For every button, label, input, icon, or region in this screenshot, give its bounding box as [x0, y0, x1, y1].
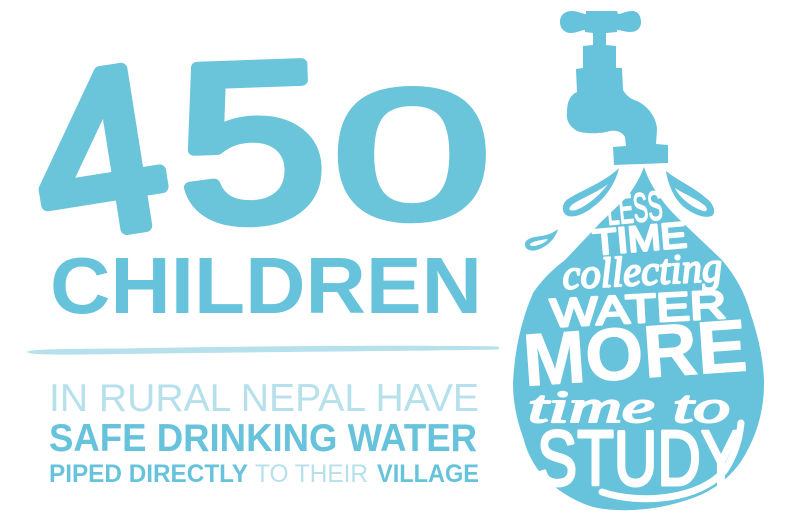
- icon: water drop: [513, 167, 764, 510]
- line: in rural nepal have: IN RURAL NEPAL HAVE: [49, 377, 479, 420]
- illustration: tap and water drop: [513, 11, 764, 510]
- heading: children: CHILDREN: [50, 241, 482, 330]
- lettering: study: STUDY: [537, 414, 741, 502]
- words: piped directly: PIPED DIRECTLY: [49, 460, 248, 488]
- big number 450: [15, 14, 492, 289]
- text block: description: [49, 377, 479, 488]
- lettering: collecting: collecting: [561, 245, 723, 299]
- words: to their: TO THEIR: [255, 460, 368, 488]
- lettering: time to: time to: [528, 381, 730, 432]
- line: safe drinking water: SAFE DRINKING WATER: [49, 417, 477, 460]
- digit 5: 5: [174, 14, 330, 270]
- lettering: more: MORE: [520, 304, 750, 402]
- hand lettering in drop: [520, 182, 750, 502]
- icon: small droplet: [525, 229, 558, 251]
- icon: left splash: [563, 168, 619, 216]
- icon: tap: [560, 11, 668, 165]
- lettering: water: WATER: [549, 283, 727, 336]
- lettering: time: TIME: [591, 214, 688, 263]
- digit 0: 0: [332, 52, 492, 258]
- digit 4: 4: [15, 16, 182, 289]
- words: village: VILLAGE: [377, 460, 479, 488]
- divider line: [27, 346, 500, 355]
- icon: right splash: [666, 171, 714, 217]
- lettering: less: LESS: [604, 182, 665, 234]
- lettering: study tail swoosh: [602, 423, 741, 499]
- line: piped directly to their village: [49, 460, 479, 488]
